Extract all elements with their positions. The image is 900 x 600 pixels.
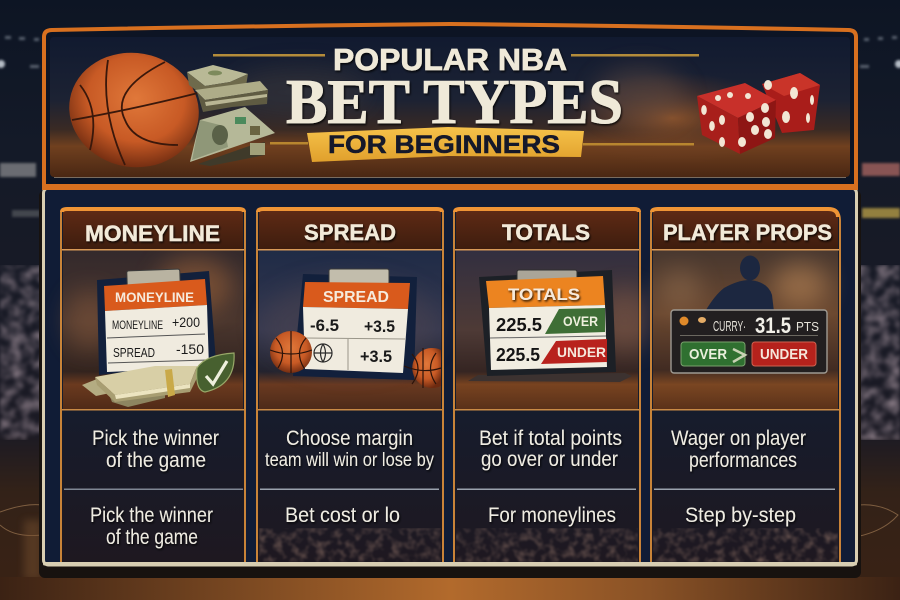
description: spread: Choose margin — [286, 427, 413, 450]
icon: clipboard moneyline: MONEYLINE — [115, 289, 194, 305]
ribbon: for beginners — [270, 127, 694, 162]
description: player props: Wager on player — [671, 427, 806, 450]
scoreboard: player line: OVER — [689, 346, 727, 363]
description: totals — [479, 427, 622, 527]
icon: clipboard moneyline — [97, 269, 216, 375]
icon: cash stacks — [187, 65, 275, 166]
scoreboard: player line: UNDER — [760, 346, 808, 363]
icon: cash — [82, 366, 197, 407]
description: moneyline: Pick the winner — [92, 427, 219, 450]
heading: player props: PLAYER PROPS — [663, 220, 832, 245]
icon: clipboard spread: +3.5 — [364, 317, 395, 336]
description: moneyline: of the game — [106, 526, 198, 549]
description: spread — [265, 427, 434, 527]
description: player props: performances — [689, 449, 797, 472]
icon: clipboard moneyline: -150 — [176, 341, 204, 357]
card: totals — [454, 209, 653, 563]
heading: moneyline: MONEYLINE — [85, 221, 220, 246]
scoreboard: player line: PTS — [796, 319, 819, 334]
icon: basketball right — [404, 348, 441, 388]
icon: clipboard totals: UNDER — [557, 344, 606, 360]
description: totals: For moneylines — [488, 504, 616, 527]
description: player props — [671, 427, 806, 527]
description: totals: go over or under — [481, 448, 618, 471]
card: spread — [257, 209, 443, 563]
icon: check shield — [197, 353, 234, 392]
icon: clipboard spread: +3.5 — [360, 347, 392, 366]
icon: clipboard totals — [468, 270, 632, 382]
description: spread: team will win or lose by — [265, 450, 434, 471]
ribbon: for beginners: FOR BEGINNERS — [328, 131, 560, 159]
icon: basketball — [60, 43, 208, 177]
description: moneyline — [90, 427, 219, 549]
icon: clipboard spread: -6.5 — [310, 316, 339, 335]
bottom frame ledge — [43, 562, 857, 566]
heading: totals: TOTALS — [502, 220, 590, 245]
heading: spread: SPREAD — [304, 220, 396, 245]
icon: clipboard totals: OVER — [563, 313, 598, 329]
scoreboard: player line — [671, 310, 827, 373]
icon: clipboard totals: 225.5 — [496, 315, 542, 335]
description: player props: Step by-step — [685, 504, 796, 527]
card: player props — [651, 209, 840, 563]
description: spread: Bet cost or lo — [285, 504, 400, 527]
card: moneyline — [61, 209, 245, 563]
crowd texture in lower card panels — [259, 528, 838, 562]
description: moneyline: Pick the winner — [90, 504, 213, 527]
icon: clipboard totals: TOTALS — [508, 285, 580, 304]
card image: moneyline — [63, 250, 243, 410]
icon: clipboard moneyline: +200 — [172, 314, 200, 330]
icon: dice — [697, 73, 820, 154]
icon: basketball left — [270, 331, 312, 373]
card image: spread — [259, 250, 441, 410]
icon: clipboard moneyline: MONEYLINE — [112, 318, 163, 332]
icon: clipboard moneyline: SPREAD — [113, 345, 155, 360]
scoreboard: player line: 31.5 — [755, 313, 791, 338]
icon: clipboard totals: 225.5 — [496, 345, 540, 365]
icon: clipboard spread: SPREAD — [323, 289, 389, 306]
card image: totals — [456, 250, 653, 410]
icon: player silhouette — [706, 256, 774, 312]
description: moneyline: of the game — [106, 449, 206, 472]
main panel frame — [39, 188, 861, 578]
header banner — [42, 24, 858, 190]
card image: player props — [653, 250, 838, 410]
title line: bet types: BET TYPES — [286, 66, 623, 137]
title line: popular nba: POPULAR NBA — [333, 42, 567, 77]
description: totals: Bet if total points — [479, 427, 622, 450]
icon: clipboard spread — [293, 269, 417, 380]
scoreboard: player line: CURRY· — [713, 318, 746, 335]
